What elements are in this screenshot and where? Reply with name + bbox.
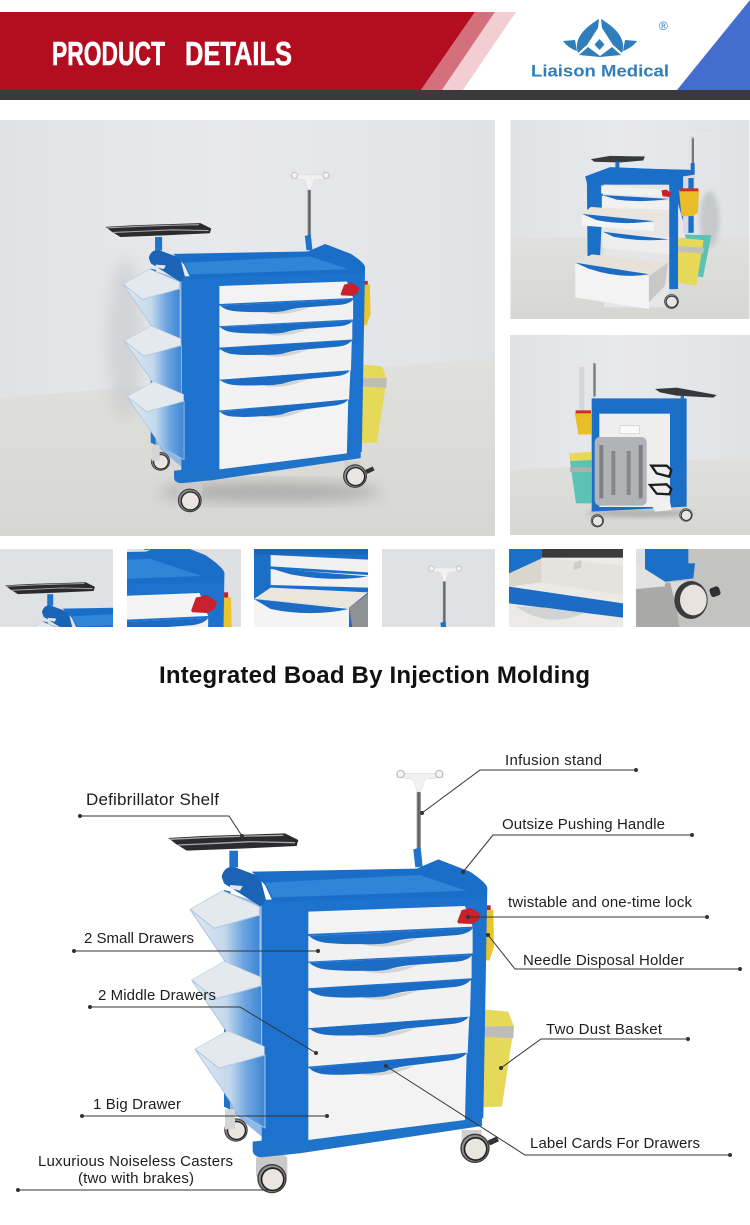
callout: big drawer (80, 1096, 329, 1118)
trolley frame (585, 167, 695, 307)
main product photo (0, 120, 495, 536)
callout: label cards (384, 1064, 732, 1157)
drawers (575, 185, 669, 309)
thumbnail: drawer interior (509, 549, 623, 627)
caster (664, 294, 679, 309)
callout: middle drawers (88, 987, 318, 1055)
blue corner triangle (677, 0, 750, 90)
callout: needle holder (486, 933, 742, 971)
callout: big drawer: 1 Big Drawer (93, 1096, 181, 1113)
callout: casters (16, 1153, 268, 1192)
defibrillator shelf (591, 156, 645, 162)
side photo: rear view (510, 335, 750, 535)
red lock (662, 190, 672, 197)
callout: label cards: Label Cards For Drawers (530, 1135, 700, 1152)
section heading: Integrated Boad By Injection Molding (159, 662, 590, 689)
callout: infusion stand: Infusion stand (505, 752, 602, 769)
thumbnail: caster (636, 549, 750, 627)
socket plate (620, 426, 639, 434)
defibrillator shelf (655, 388, 717, 398)
dark header rule (0, 90, 750, 100)
logo: Liaison Medical (531, 19, 669, 80)
teal and yellow baskets (569, 452, 592, 461)
callout: pushing handle (461, 816, 694, 874)
callout: dust basket (499, 1021, 690, 1070)
title: product details (52, 35, 292, 72)
callouts (16, 752, 742, 1192)
side photo: open drawers (510, 120, 750, 319)
photo background (510, 335, 750, 535)
callout: dust basket: Two Dust Basket (546, 1021, 663, 1038)
callout: casters: (two with brakes) (78, 1170, 194, 1187)
callout: defibrillator shelf: Defibrillator Shelf (86, 790, 219, 809)
main trolley (105, 172, 387, 512)
black straps (650, 466, 671, 494)
sharps holder (575, 412, 592, 434)
thumbnail: infusion pole (382, 549, 495, 627)
callout: infusion stand (420, 752, 638, 815)
photo wall and floor (0, 120, 495, 536)
registered mark: ® (659, 19, 668, 33)
callout: small drawers (72, 930, 320, 953)
thumbnail: drawer slide (254, 549, 368, 627)
dust baskets (685, 234, 711, 278)
infusion pole (681, 130, 718, 175)
grey back board (595, 437, 647, 506)
callout: pushing handle: Outsize Pushing Handle (502, 816, 665, 833)
icon: lotus mark (563, 19, 637, 57)
sharps holder (679, 190, 699, 216)
title: product details: DETAILS (185, 35, 292, 72)
annotated trolley (168, 770, 514, 1193)
header banner (0, 0, 750, 100)
thumbnail: shelf (0, 549, 113, 627)
red title band (0, 12, 475, 90)
title: product details: PRODUCT (52, 35, 165, 72)
casters (591, 514, 604, 527)
logo wordmark: Liaison Medical (531, 62, 669, 80)
callout: needle holder: Needle Disposal Holder (523, 952, 684, 969)
callout: lock (466, 894, 709, 919)
thumbnail: lock (127, 549, 241, 627)
callout: defibrillator shelf (78, 790, 244, 838)
callout: lock: twistable and one-time lock (508, 894, 692, 911)
callout: casters: Luxurious Noiseless Casters (38, 1153, 233, 1170)
callout: small drawers: 2 Small Drawers (84, 930, 194, 947)
infusion stand (568, 358, 607, 410)
callout: middle drawers: 2 Middle Drawers (98, 987, 216, 1004)
rear frame (592, 398, 687, 512)
photo background (511, 120, 749, 319)
